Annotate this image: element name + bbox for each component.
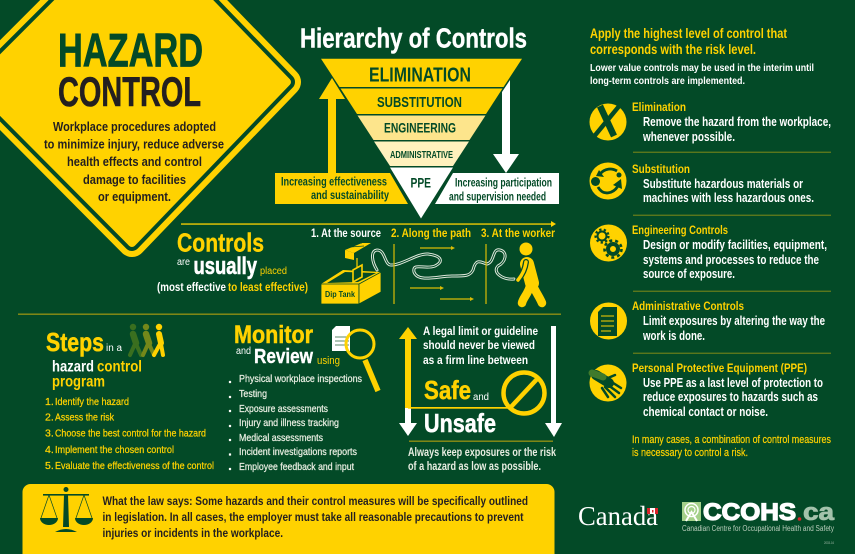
text block: definition: or equipment. xyxy=(98,189,171,204)
heading: safe and unsafe: Safe xyxy=(424,375,471,405)
item: personal protective equipment xyxy=(590,363,823,419)
level: ppe xyxy=(390,168,453,218)
list: steps: Identify the hazard xyxy=(55,396,129,408)
item: administrative controls xyxy=(590,301,825,343)
heading: steps in a hazard control program: program xyxy=(52,374,105,390)
panel: hazard control diamond sign xyxy=(0,0,287,243)
arrow: divider source to worker xyxy=(181,221,556,227)
logo: ccohs xyxy=(682,499,835,545)
icon: three walking figures xyxy=(130,324,163,355)
heading: controls are usually placed: usually xyxy=(194,253,257,280)
item: engineering controls: source of exposure. xyxy=(643,267,735,281)
level: elimination: ELIMINATION xyxy=(369,65,471,87)
text block: law: What the law says: Some hazards and their control measures will be specifically outlined xyxy=(102,494,528,508)
text block: law: injuries or incidents in the workplace. xyxy=(102,526,283,540)
text block: legal limit xyxy=(423,326,538,367)
heading: steps in a hazard control program: hazard xyxy=(52,358,94,376)
heading: hierarchy of controls: Hierarchy of Controls xyxy=(300,22,527,54)
text block: law: in legislation. In all cases, the employer must take all reasonable precautions to prevent xyxy=(102,510,524,524)
heading: controls are usually placed xyxy=(157,228,308,294)
arrow: increasing effectiveness: and sustainability xyxy=(311,190,389,202)
heading: apply the highest level: Apply the highest level of control that xyxy=(590,25,787,41)
list: steps: Choose the best control for the hazard xyxy=(55,428,206,440)
icon: swap arrows xyxy=(590,162,626,200)
item: personal protective equipment: chemical contact or noise. xyxy=(643,405,768,419)
heading: apply the highest level: Lower value controls may be used in the interim until xyxy=(590,63,814,74)
list: steps: 3. xyxy=(45,428,54,440)
illustration: dip tank xyxy=(321,243,381,304)
list: monitor and review methods: Incident investigations reports xyxy=(239,446,357,458)
text block: always keep exposures low: of a hazard as low as possible. xyxy=(408,461,541,473)
text block: law xyxy=(102,494,528,540)
list: monitor and review methods xyxy=(229,373,362,473)
text block: definition: health effects and control xyxy=(67,154,202,169)
heading: steps in a hazard control program: control xyxy=(97,358,142,376)
heading: monitor and review: using xyxy=(317,355,340,367)
list: monitor and review methods: Physical workplace inspections xyxy=(239,373,362,385)
text: control locations: 2. Along the path xyxy=(391,226,471,240)
text: control locations: 3. At the worker xyxy=(481,226,555,240)
item: substitution: Substitution xyxy=(632,164,690,176)
arrow: increasing participation: and supervision needed xyxy=(449,192,546,204)
logo: ccohs: CCOHS xyxy=(703,499,796,526)
text: control locations xyxy=(311,226,555,240)
arrow: safe up xyxy=(399,327,508,436)
arrows: along the path xyxy=(394,244,486,304)
item: personal protective equipment: Personal Protective Equipment (PPE) xyxy=(632,363,807,375)
text block: legal limit: should never be viewed xyxy=(423,340,535,352)
list: steps: Evaluate the effectiveness of the control xyxy=(55,460,214,472)
text block: legal limit: as a firm line between xyxy=(423,355,528,367)
logo: ccohs: ca xyxy=(803,499,835,526)
list: steps: 2. xyxy=(45,412,54,424)
item: elimination xyxy=(590,102,831,144)
level: substitution xyxy=(340,88,502,114)
logo: ccohs: 2003-16 xyxy=(824,541,834,545)
heading: apply the highest level: long-term controls are implemented. xyxy=(590,76,745,87)
title: hazard: HAZARD xyxy=(58,24,203,76)
text block: definition: Workplace procedures adopted xyxy=(53,119,216,134)
list: steps: 5. xyxy=(45,460,54,472)
heading: apply the highest level: corresponds with the risk level. xyxy=(590,41,756,57)
chart: inverted triangle hierarchy xyxy=(321,59,522,219)
heading: controls are usually placed: (most effective xyxy=(157,280,226,294)
list: steps: Assess the risk xyxy=(55,412,115,424)
arrow: increasing effectiveness: Increasing effectiveness xyxy=(281,176,387,188)
list: steps: 1. xyxy=(45,396,54,408)
icon: document xyxy=(590,302,627,340)
level: administrative: ADMINISTRATIVE xyxy=(390,150,453,161)
item: engineering controls: Engineering Controls xyxy=(632,225,728,237)
icon: document and magnifier xyxy=(332,326,378,391)
text block: combination of controls: is necessary to control a risk. xyxy=(632,447,748,459)
icon: ccohs emblem xyxy=(682,502,701,521)
icon: glove xyxy=(590,364,626,402)
level: ppe: PPE xyxy=(410,175,431,191)
list: monitor and review methods: Injury and illness tracking xyxy=(239,417,339,429)
heading: monitor and review: Monitor xyxy=(234,321,313,349)
item: elimination: whenever possible. xyxy=(642,130,735,144)
text block: definition: to minimize injury, reduce adverse xyxy=(44,136,224,152)
icon: x mark xyxy=(590,104,626,140)
list: monitor and review methods: Testing xyxy=(239,388,267,400)
logo: canada wordmark: Canada xyxy=(578,501,658,531)
level: engineering: ENGINEERING xyxy=(384,120,456,136)
item: engineering controls xyxy=(590,224,827,281)
list: steps: Implement the chosen control xyxy=(55,444,174,456)
arrow: increasing effectiveness xyxy=(275,78,408,204)
heading: steps in a hazard control program: Steps xyxy=(46,327,104,357)
text block: definition xyxy=(44,119,224,204)
icon: scales of justice xyxy=(40,487,93,532)
heading: steps in a hazard control program: in a xyxy=(106,343,122,354)
heading: safe and unsafe: and xyxy=(473,392,489,403)
item: substitution: machines with less hazardous ones. xyxy=(643,191,814,205)
text block: always keep exposures low: Always keep exposures or the risk xyxy=(408,447,556,459)
heading: safe and unsafe xyxy=(424,375,496,438)
text: control locations: 1. At the source xyxy=(311,226,381,240)
icon: prohibition sign xyxy=(504,372,544,414)
arrow: increasing participation: Increasing participation xyxy=(455,178,552,190)
heading: steps in a hazard control program xyxy=(46,327,142,390)
arrow: unsafe down xyxy=(545,326,562,437)
list: monitor and review methods: Employee feedback and input xyxy=(239,461,354,473)
heading: controls are usually placed: to least effective) xyxy=(228,280,308,294)
item: elimination: Elimination xyxy=(632,102,686,114)
icon: worker xyxy=(518,242,542,303)
item: administrative controls: Administrative Controls xyxy=(632,301,744,313)
heading: monitor and review xyxy=(234,321,340,368)
list: monitor and review methods: Exposure assessments xyxy=(239,403,328,415)
level: substitution: SUBSTITUTION xyxy=(377,94,462,111)
illustration: dip tank: Dip Tank xyxy=(325,290,355,299)
illustration: contaminant path xyxy=(372,250,514,279)
heading: safe and unsafe: Unsafe xyxy=(424,408,496,438)
text block: combination of controls xyxy=(632,434,831,459)
item: substitution xyxy=(590,162,814,205)
text block: definition: damage to facilities xyxy=(83,172,186,187)
list: steps: 4. xyxy=(45,444,54,456)
heading: apply the highest level xyxy=(590,25,814,87)
title: control: CONTROL xyxy=(58,68,201,115)
list: monitor and review methods: Medical assessments xyxy=(239,432,323,444)
icon: gears xyxy=(590,224,627,262)
heading: monitor and review: Review xyxy=(254,346,313,368)
heading: controls are usually placed: placed xyxy=(260,266,287,277)
item: substitution: Substitute hazardous materials or xyxy=(643,177,803,191)
heading: controls are usually placed: Controls xyxy=(177,228,264,258)
item: administrative controls: work is done. xyxy=(642,329,705,343)
panel: what the law says xyxy=(22,484,554,554)
heading: monitor and review: and xyxy=(236,346,251,357)
list: steps xyxy=(45,396,214,472)
text block: always keep exposures low xyxy=(408,447,556,473)
level: engineering xyxy=(358,116,486,140)
arrow: increasing participation xyxy=(435,80,559,204)
text block: legal limit: A legal limit or guideline xyxy=(423,326,538,338)
level: elimination xyxy=(321,59,522,87)
level: administrative xyxy=(374,142,469,166)
heading: controls are usually placed: are xyxy=(177,257,190,268)
